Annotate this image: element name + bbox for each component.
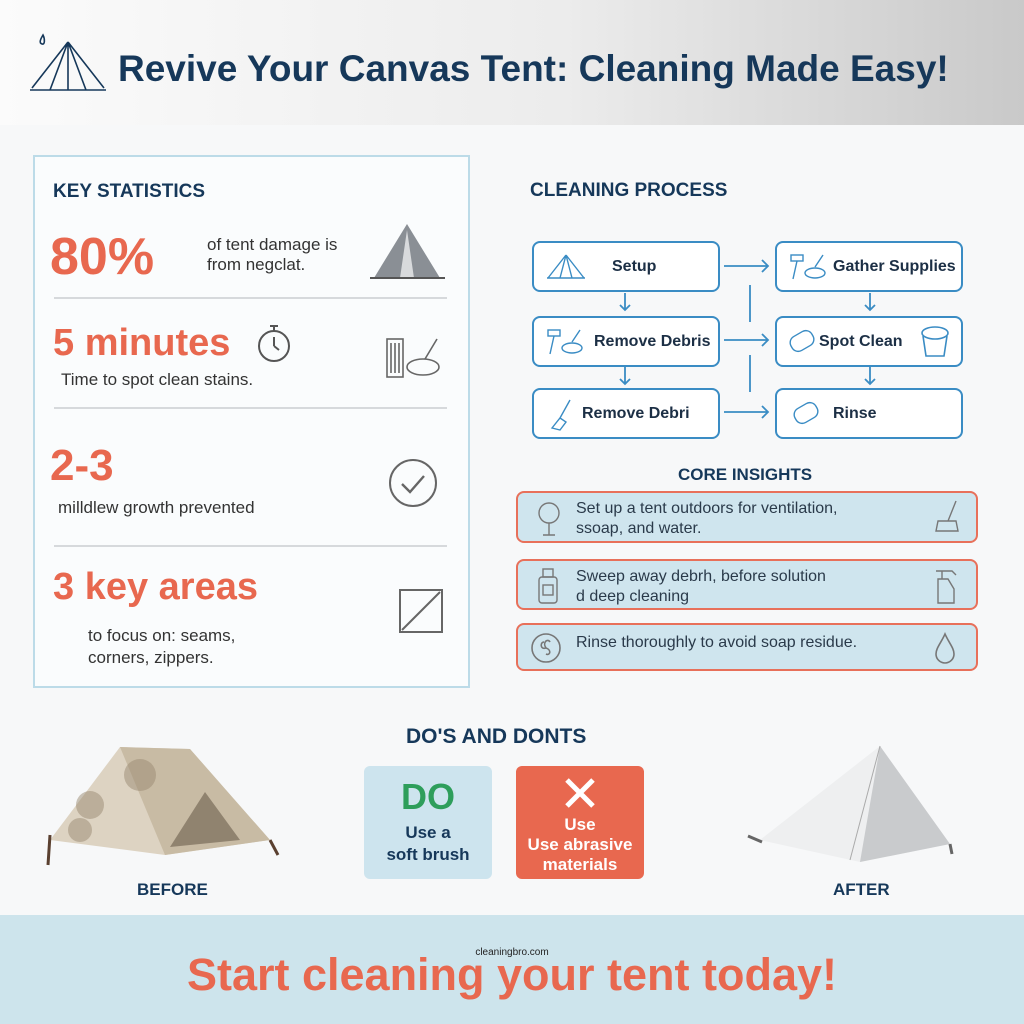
stat 3 key areas: 3 key areas — [53, 566, 258, 608]
icon: stopwatch — [258, 325, 290, 362]
dont card: materials — [543, 855, 617, 874]
label: after: AFTER — [833, 880, 890, 899]
heading: cleaning process: CLEANING PROCESS — [530, 180, 727, 201]
panel: key statistics — [33, 155, 470, 688]
icon: check — [389, 459, 437, 507]
step: spot clean: Spot Clean — [819, 332, 903, 350]
arrows — [619, 259, 876, 419]
panel: key statistics: Time to spot clean stains. — [61, 370, 253, 389]
insight 1 — [516, 491, 978, 543]
dont card: Use — [564, 815, 596, 834]
do card: soft brush — [386, 845, 470, 864]
stat 2-3: 2-3 — [50, 441, 114, 490]
step: setup: Setup — [612, 258, 656, 274]
flowchart — [532, 241, 963, 439]
step: remove debris — [532, 316, 720, 367]
before tent — [46, 747, 280, 866]
header — [0, 0, 1024, 125]
label: before: BEFORE — [137, 880, 208, 899]
stat 80%: 80% — [50, 228, 154, 286]
icon: square — [399, 589, 443, 633]
heading: core insights: CORE INSIGHTS — [678, 465, 812, 484]
panel: key statistics: to focus on: seams, — [88, 626, 235, 645]
do card — [364, 766, 492, 879]
dont card — [516, 766, 644, 879]
panel: key statistics: from negclat. — [207, 255, 305, 274]
icon: brush and soap — [386, 338, 440, 378]
step: gather supplies: Gather Supplies — [833, 258, 956, 274]
panel: key statistics: of tent damage is — [207, 235, 337, 254]
do card: DO — [401, 776, 455, 817]
do card: Use a — [405, 823, 451, 842]
insight 3 — [516, 623, 978, 671]
insight 2 — [516, 559, 978, 610]
step: rinse: Rinse — [833, 404, 877, 422]
step: spot clean — [775, 316, 963, 367]
after tent — [748, 746, 954, 862]
title: Revive Your Canvas Tent: Cleaning Made Easy! — [118, 48, 949, 89]
insight 1: Set up a tent outdoors for ventilation, — [576, 500, 838, 517]
step: remove debri: Remove Debri — [582, 404, 690, 422]
insight 2: Sweep away debrh, before solution — [576, 568, 826, 585]
insight 1: ssoap, and water. — [576, 520, 701, 537]
insight 3: Rinse thoroughly to avoid soap residue. — [576, 634, 857, 651]
icon: tent gray — [370, 224, 445, 279]
step: remove debri — [532, 388, 720, 439]
footer — [0, 915, 1024, 1024]
heading: KEY STATISTICS — [53, 181, 205, 202]
step: remove debris: Remove Debris — [594, 332, 710, 350]
insight 2: d deep cleaning — [576, 588, 689, 605]
panel: key statistics: corners, zippers. — [88, 648, 214, 667]
step: rinse — [775, 388, 963, 439]
step: setup — [532, 241, 720, 292]
panel: key statistics: milldlew growth prevented — [58, 498, 255, 517]
step: gather supplies — [775, 241, 963, 292]
footer: Start cleaning your tent today! — [187, 949, 837, 1000]
icon: tent — [30, 33, 106, 91]
stat 5 minutes: 5 minutes — [53, 322, 230, 364]
heading: do's and donts: DO'S AND DONTS — [406, 725, 586, 748]
footer: cleaningbro.com — [475, 947, 549, 958]
dont card: Use abrasive — [528, 835, 632, 854]
